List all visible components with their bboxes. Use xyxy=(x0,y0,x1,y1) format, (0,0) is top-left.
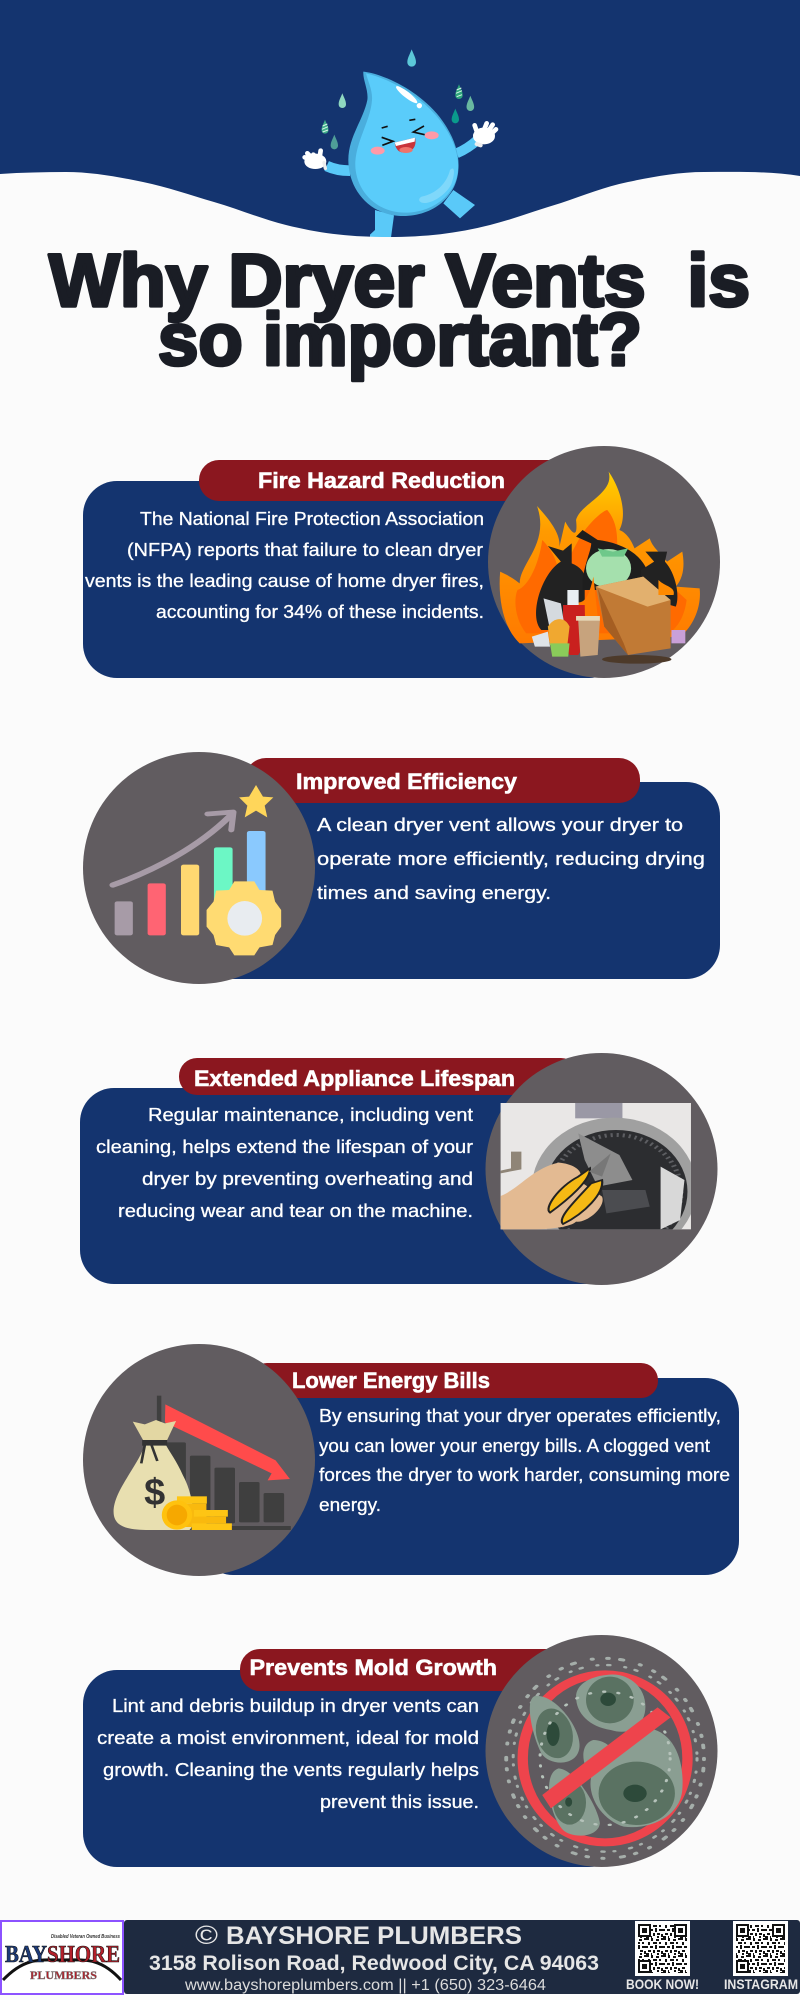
footer band xyxy=(1,1920,800,1994)
panel: Improved Efficiency xyxy=(83,752,720,984)
heading pill xyxy=(240,1649,580,1691)
body text: forces the dryer to work harder, consuming more xyxy=(319,1465,730,1485)
body text xyxy=(96,1105,473,1221)
body text: reducing wear and tear on the machine. xyxy=(118,1201,473,1221)
body text: prevent this issue. xyxy=(320,1792,479,1812)
body text: dryer by preventing overheating and xyxy=(142,1169,473,1189)
company logo: BAY xyxy=(5,1942,47,1968)
book now label: BOOK NOW! xyxy=(626,1977,699,1992)
panel: Lower Energy Bills xyxy=(83,1344,739,1576)
body text: Regular maintenance, including vent xyxy=(148,1105,473,1125)
company logo: PLUMBERS xyxy=(30,1968,97,1982)
icon: water drop mascot xyxy=(305,49,496,240)
address: 3158 Rolison Road, Redwood City, CA 94063 xyxy=(149,1952,599,1975)
body text: (NFPA) reports that failure to clean dryer xyxy=(127,540,483,560)
body text: By ensuring that your dryer operates efficiently, xyxy=(319,1406,721,1426)
card background xyxy=(199,1378,739,1575)
body text: Lint and debris buildup in dryer vents can xyxy=(112,1696,479,1716)
heading: Lower Energy Bills xyxy=(292,1368,490,1393)
website and phone: www.bayshoreplumbers.com || +1 (650) 323-6464 xyxy=(184,1977,546,1994)
card background xyxy=(83,481,623,678)
body text: cleaning, helps extend the lifespan of your xyxy=(96,1137,473,1157)
icon: dryer repair photo xyxy=(486,1053,718,1285)
body text: The National Fire Protection Association xyxy=(140,509,484,529)
panel: Prevents Mold Growth xyxy=(83,1635,718,1867)
body text xyxy=(85,509,484,622)
panel: Fire Hazard Reduction xyxy=(83,446,720,678)
body text: you can lower your energy bills. A clogged vent xyxy=(319,1436,710,1456)
title: Why Dryer Vents is xyxy=(49,239,750,322)
body text: accounting for 34% of these incidents. xyxy=(156,602,484,622)
body text: energy. xyxy=(319,1495,381,1515)
body text: create a moist environment, ideal for mold xyxy=(97,1728,479,1748)
dollar sign: $ xyxy=(144,1471,165,1514)
body text: A clean dryer vent allows your dryer to xyxy=(317,815,683,835)
body text: growth. Cleaning the vents regularly helps xyxy=(103,1760,479,1780)
icon: money bag and falling chart xyxy=(83,1344,315,1576)
header navy band xyxy=(0,0,800,245)
icon: burning trash pile xyxy=(488,446,720,678)
card background xyxy=(180,782,720,979)
white wave divider xyxy=(0,172,800,400)
heading pill xyxy=(245,758,640,803)
heading pill xyxy=(250,1363,658,1398)
company name: BAYSHORE PLUMBERS xyxy=(226,1922,522,1950)
heading: Extended Appliance Lifespan xyxy=(194,1066,515,1091)
card background xyxy=(83,1670,623,1867)
title: so important? xyxy=(158,298,642,381)
body text: times and saving energy. xyxy=(317,883,551,903)
company logo xyxy=(1,1921,123,1994)
icon: rising chart with gear xyxy=(83,752,315,984)
body text xyxy=(319,1406,730,1515)
company name: © xyxy=(195,1920,218,1950)
heading: Prevents Mold Growth xyxy=(250,1655,497,1680)
card background xyxy=(80,1088,620,1284)
title xyxy=(49,239,750,381)
icon: no mold symbol xyxy=(486,1635,718,1867)
heading pill xyxy=(199,460,579,501)
body text: operate more efficiently, reducing drying xyxy=(317,849,705,869)
falling droplets xyxy=(322,49,474,149)
heading pill xyxy=(179,1058,579,1095)
body text xyxy=(317,815,705,903)
QR code: book now xyxy=(635,1921,690,1976)
company logo: SHORE xyxy=(47,1942,120,1968)
left glove xyxy=(305,151,325,168)
right glove xyxy=(475,123,496,145)
body text: vents is the leading cause of home dryer fires, xyxy=(85,571,484,591)
QR code: instagram xyxy=(733,1921,788,1976)
panel: Extended Appliance Lifespan xyxy=(80,1053,718,1285)
heading: Improved Efficiency xyxy=(296,769,518,794)
body text xyxy=(97,1696,479,1812)
company logo: Disabled Veteran Owned Business xyxy=(51,1934,120,1940)
heading: Fire Hazard Reduction xyxy=(258,468,505,493)
